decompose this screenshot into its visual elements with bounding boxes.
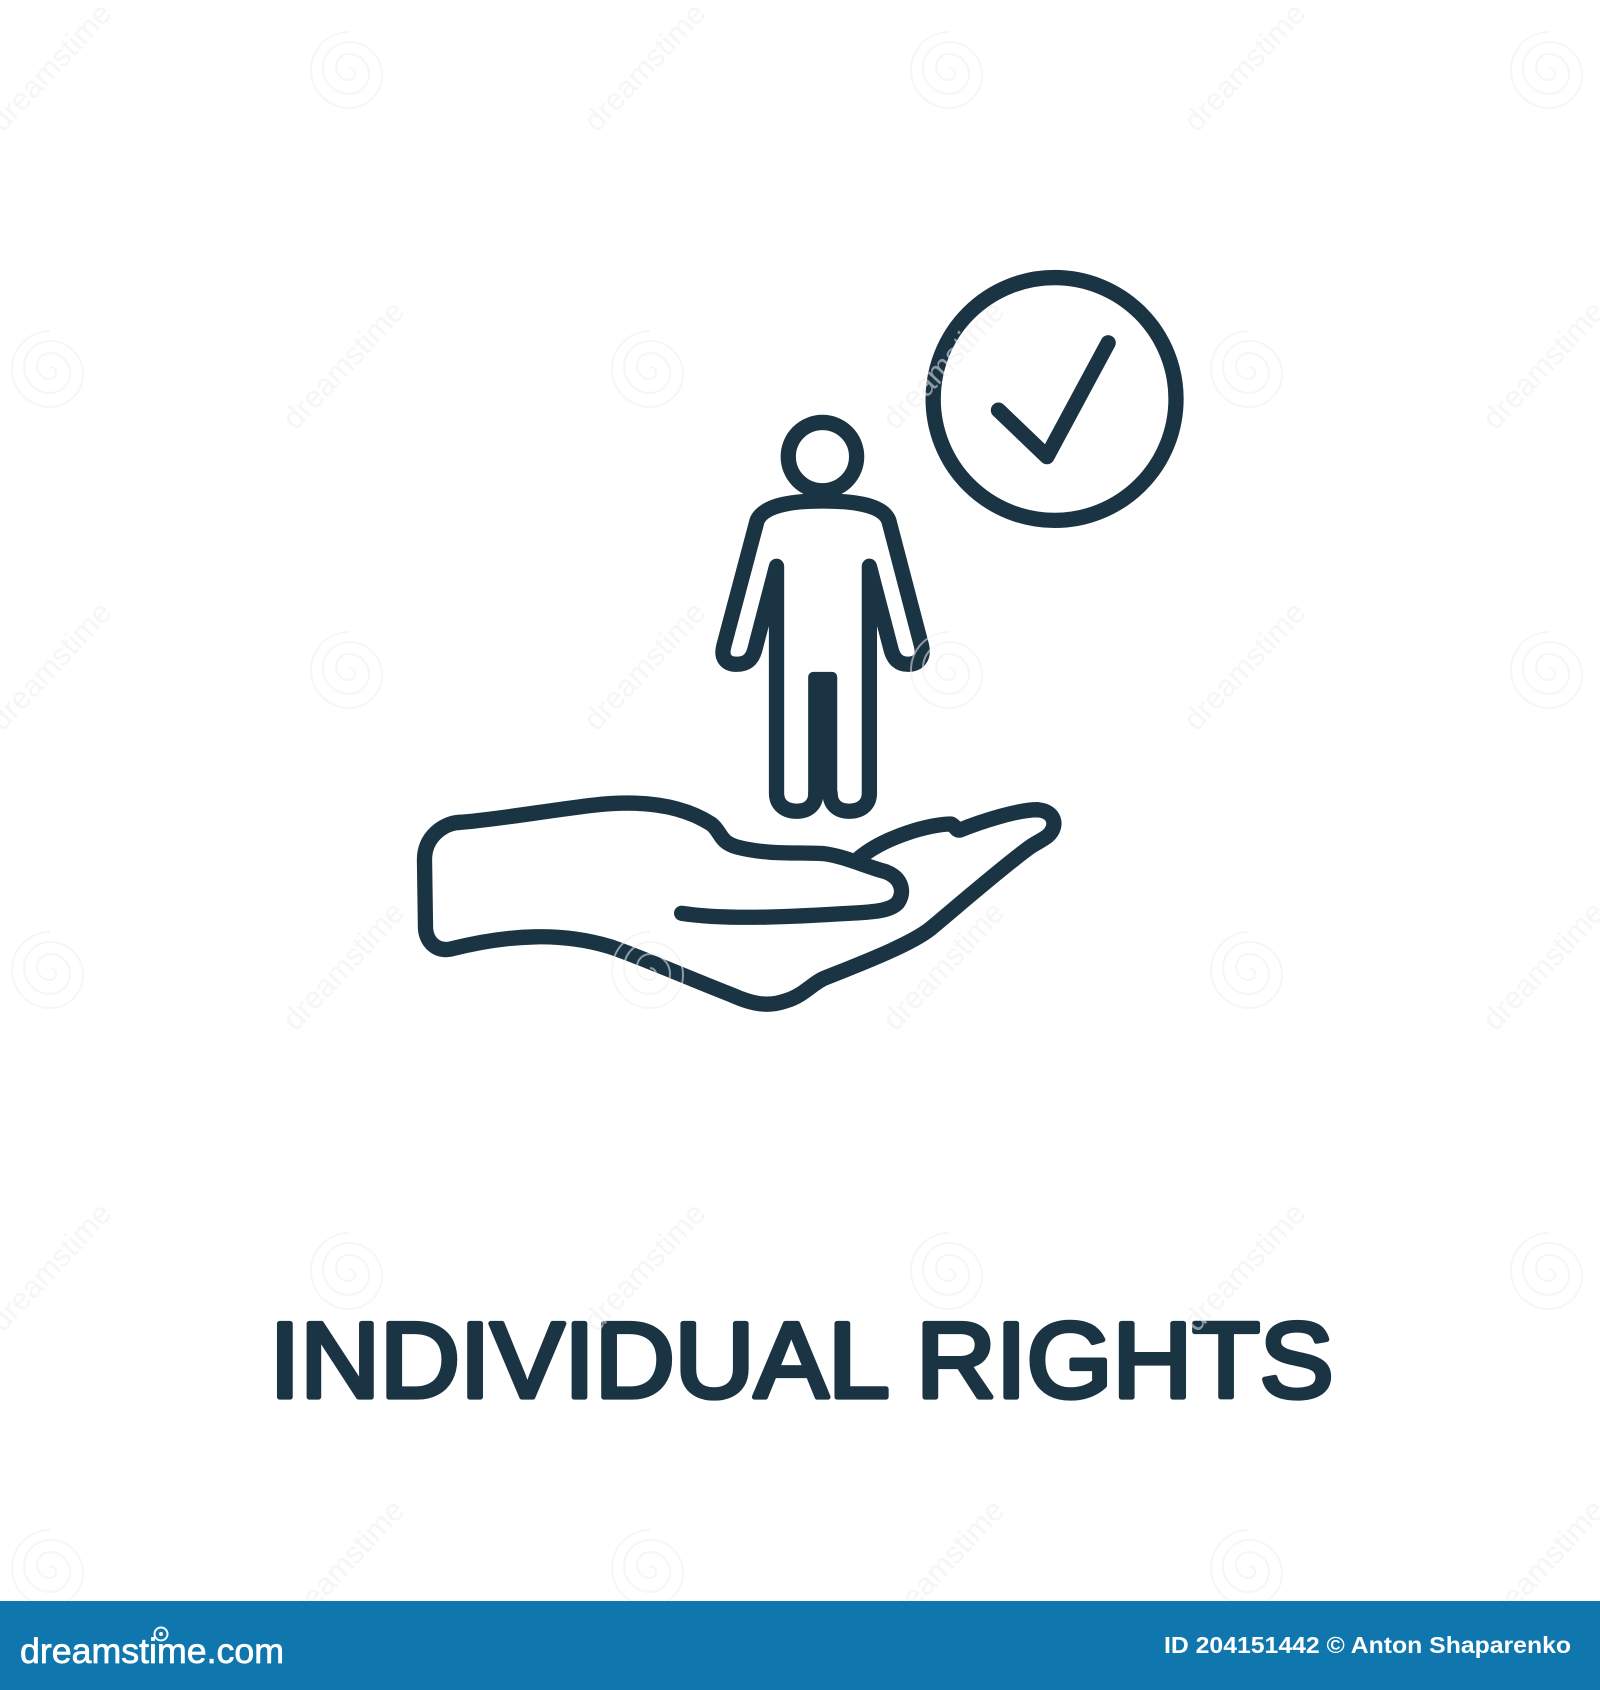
footer logo: dreamstime.com bbox=[20, 1632, 284, 1671]
icon: person bbox=[723, 422, 922, 811]
title: INDIVIDUAL RIGHTS bbox=[270, 1300, 1334, 1420]
footer bar bbox=[0, 1601, 1600, 1690]
watermark layer: dreamstime bbox=[1176, 595, 1312, 737]
watermark layer: dreamstime bbox=[576, 1196, 712, 1338]
watermark layer: dreamstime bbox=[875, 294, 1011, 436]
watermark layer: dreamstime bbox=[275, 895, 411, 1037]
watermark layer: dreamstime bbox=[875, 895, 1011, 1037]
watermark layer: dreamstime bbox=[1176, 1196, 1312, 1338]
footer credit: ID 204151442 © Anton Shaparenko bbox=[1164, 1632, 1571, 1658]
icon: check mark badge bbox=[933, 278, 1176, 520]
watermark layer: dreamstime bbox=[275, 1493, 411, 1635]
watermark layer: dreamstime bbox=[275, 294, 411, 436]
watermark layer: dreamstime bbox=[875, 1493, 1011, 1635]
watermark layer: dreamstime bbox=[576, 595, 712, 737]
icon: open hand bbox=[424, 803, 1054, 1004]
icon: person standing on an open hand with check mark bbox=[424, 278, 1176, 1004]
